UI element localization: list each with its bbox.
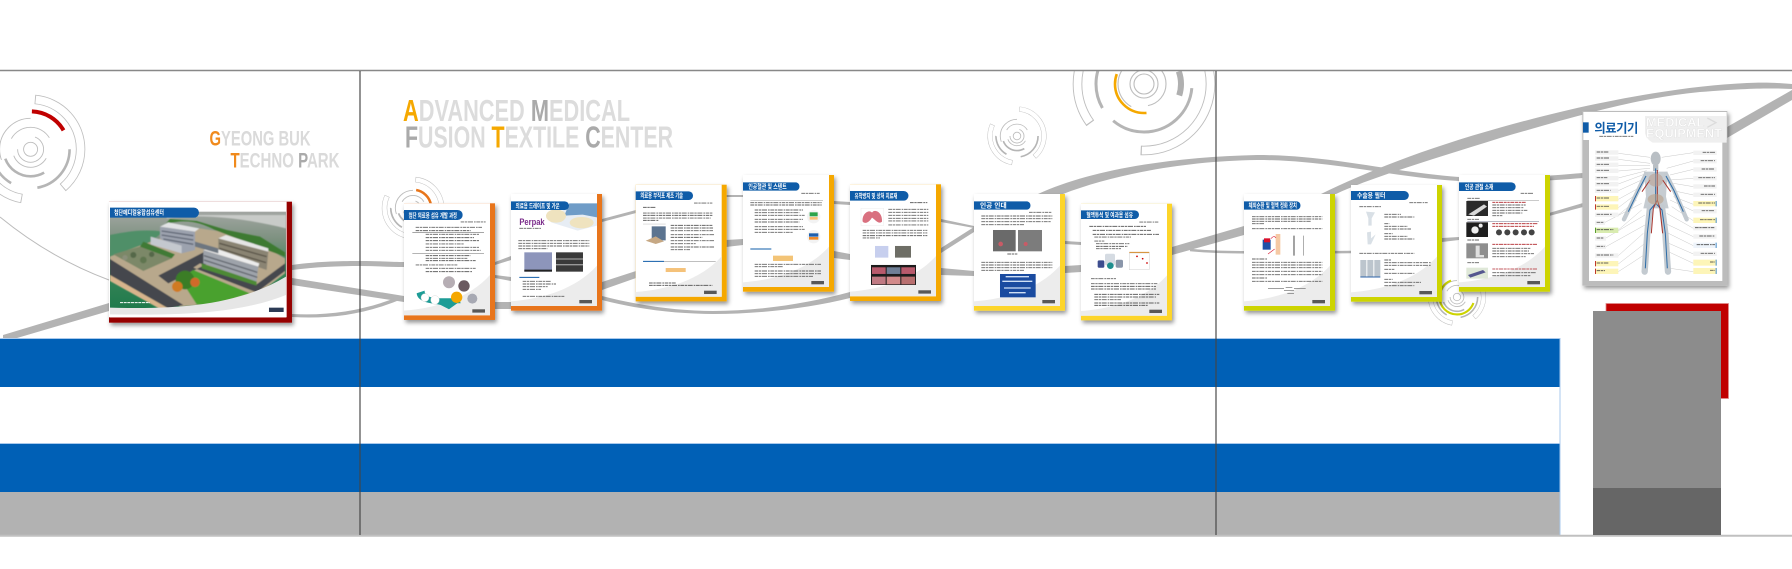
subtitle [1599,135,1633,138]
red highlights [1492,202,1538,269]
panel: yellow 2 [1081,204,1172,320]
grey scans [993,230,1042,251]
bottles [1098,254,1123,269]
body text [518,228,589,296]
roads [110,252,285,308]
blue fibre photo [1000,274,1036,297]
header: 의료용 부직포 제조 기술 [640,191,683,200]
body text [981,212,1052,270]
caption [120,301,150,304]
heading: Gyeong Buk Techno Park: GYEONG BUK [210,126,311,150]
filter cartridges [1360,260,1380,277]
panel: lime 1 [1244,194,1335,311]
device drawing [1268,287,1306,293]
header: 첨단 의료용 섬유 개발 과정 [409,210,457,219]
brand: Perpak [519,217,545,227]
circulation diagram [1263,234,1304,256]
panel: red frame behind grey pillar [1606,304,1728,398]
panel: orange 1 [404,203,495,320]
heading: Gyeong Buk Techno Park [210,126,340,172]
header art: EQUIPMENT [1646,127,1723,141]
diagram [773,256,793,261]
header: 의료용 드레이프 및 가운 [516,201,560,210]
header pill [110,208,199,218]
icon: target rings top left [0,99,81,199]
body text [1252,217,1322,281]
human body figure [1624,152,1687,272]
clinical photos [871,265,916,285]
buildings [160,227,195,253]
chart [1129,252,1149,270]
body text [1467,193,1536,276]
blue tab [1583,122,1589,133]
band: grey base [0,492,1560,535]
micrograph right [556,252,583,272]
sample squares [875,246,911,258]
body text [1359,203,1431,286]
header: 인공혈관 및 스텐트 [748,182,787,191]
leader lines [1605,153,1693,272]
panel: amber 1 [636,185,727,301]
panel: orange 2 Perpak [511,194,602,311]
icon: target rings below product panels [1430,270,1484,324]
product photos [1466,201,1488,279]
body text [1089,222,1159,305]
header art [1645,116,1727,143]
panel: yellow 1 [974,194,1065,311]
heading: Advanced Medical Fusion Textile Center: FUSION TEXTILE CENTER [405,120,673,155]
panel: building aerial view [109,202,292,323]
panel: lime 3 [1459,175,1550,292]
body text [750,193,822,276]
labels right [1693,151,1717,274]
drape image [546,203,597,231]
tissue image [861,208,884,226]
header: 혈액투석 및 여과용 섬유 [1086,210,1133,219]
site ground [110,228,285,307]
dividers [0,70,1792,72]
band: lower blue [0,444,1560,492]
logo [269,308,284,312]
panel: lime 2 [1351,185,1442,302]
process diagram [417,276,477,309]
panel: grey pillar [1593,311,1721,535]
misty backdrop [167,215,286,228]
heading: Gyeong Buk Techno Park: TECHNO PARK [230,148,340,172]
garden [113,245,172,271]
aerial scene [110,215,286,309]
header art: MEDICAL [1646,116,1704,130]
panel: amber 3 [850,184,941,301]
band: top blue [0,338,1560,387]
header pill: 첨단메디컬융합섬유센터 [114,208,164,217]
title: 의료기기 [1594,120,1638,135]
product badges [807,210,820,243]
ribbon: flowing grey bands behind the panels [0,83,1792,338]
sports field [180,270,250,306]
header: 인공 관절 소재 [1465,182,1493,191]
body text [643,203,714,285]
heading: Advanced Medical Fusion Textile Center [403,93,673,155]
body text [416,222,486,272]
sample discs [1496,229,1535,235]
body text [863,203,928,238]
header: 수술용 필터 [1357,191,1385,200]
micrograph left [524,252,552,272]
header: 인공 인대 [980,201,1007,210]
product image [646,226,666,244]
icon: target rings behind first textile panel [384,180,442,236]
icon: small target rings centre [990,109,1044,163]
tube products [1366,212,1376,244]
icon: large target rings top centre [1072,71,1216,156]
header: 체외순환 및 혈액 정화 장치 [1249,201,1297,210]
diagram [666,268,686,272]
panel: medical equipment poster [1582,111,1727,286]
panel: amber 2 [743,175,834,292]
heading: Advanced Medical Fusion Textile Center: ADVANCED MEDICAL [403,93,630,128]
header: 유착방지 및 상처 치료재 [855,191,897,200]
trees [165,219,285,257]
labels left [1595,150,1618,274]
swoosh [110,277,286,317]
